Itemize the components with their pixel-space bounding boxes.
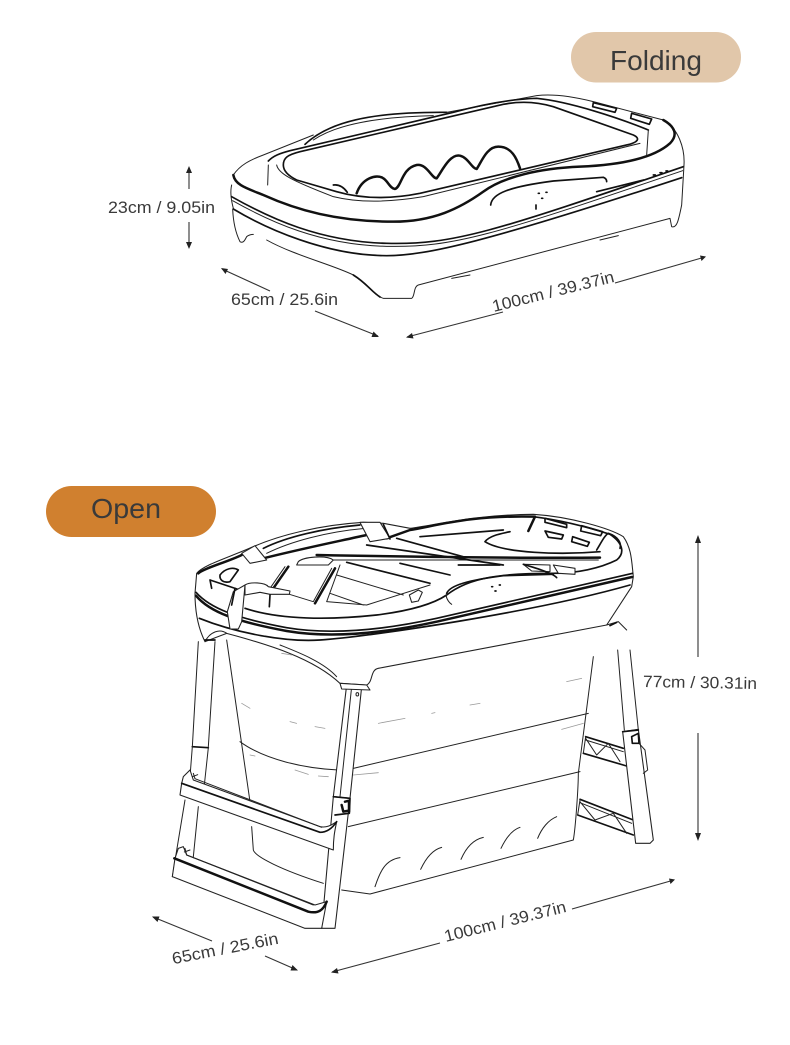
open tub basin [227, 640, 593, 894]
dimension: open width: 65cm / 25.6in [170, 930, 280, 968]
dimension: open height: 77cm / 30.31in [643, 673, 757, 693]
dimension: folded height [108, 166, 215, 249]
folded tub handle arc [305, 112, 447, 144]
folded tub folded wall waves [357, 147, 520, 193]
badge: Open [46, 486, 216, 537]
dimension: open height [643, 535, 757, 841]
dimension: open length [331, 878, 675, 974]
open tub front clips [409, 564, 575, 602]
open tub lid vents [545, 518, 603, 546]
folded tub inner tray [268, 98, 648, 201]
open tub left stand leg [172, 642, 215, 877]
dimension: folded length: 100cm / 39.37in [490, 268, 616, 316]
dimension: folded width: 65cm / 25.6in [231, 291, 338, 309]
dimension: folded height: 23cm / 9.05in [108, 199, 215, 217]
open tub rear truss braces [578, 737, 633, 835]
open tub right stand leg [618, 650, 653, 843]
illustration: open tub lower body and stand [172, 640, 653, 928]
open tub inner rim [198, 516, 622, 618]
folded tub handle slots [593, 103, 652, 124]
open tub rim outline [195, 514, 633, 685]
open tub basin bottom waves [375, 817, 557, 887]
dimension: open length: 100cm / 39.37in [442, 898, 568, 946]
open tub lower step [172, 847, 327, 928]
folded tub outer body [231, 95, 684, 298]
folded tub side panel [491, 171, 668, 209]
dimension: folded width [221, 268, 379, 337]
open tub front stand leg [322, 685, 362, 928]
badge: Open: Open [91, 493, 161, 524]
illustration: open tub lid and rim [195, 514, 633, 690]
badge: Folding [571, 32, 741, 82]
dimension: open width [152, 916, 298, 970]
open tub folded panels and slats [270, 530, 600, 605]
badge: Folding: Folding [610, 45, 702, 76]
open tub side panel [446, 574, 553, 604]
open tub corner and leg brackets [205, 622, 627, 690]
open tub hinge latch [220, 568, 290, 629]
open tub carrying handle [242, 522, 390, 563]
dimension: folded length [406, 256, 706, 338]
illustration: folded tub [231, 95, 684, 298]
open tub upper step [180, 770, 337, 850]
